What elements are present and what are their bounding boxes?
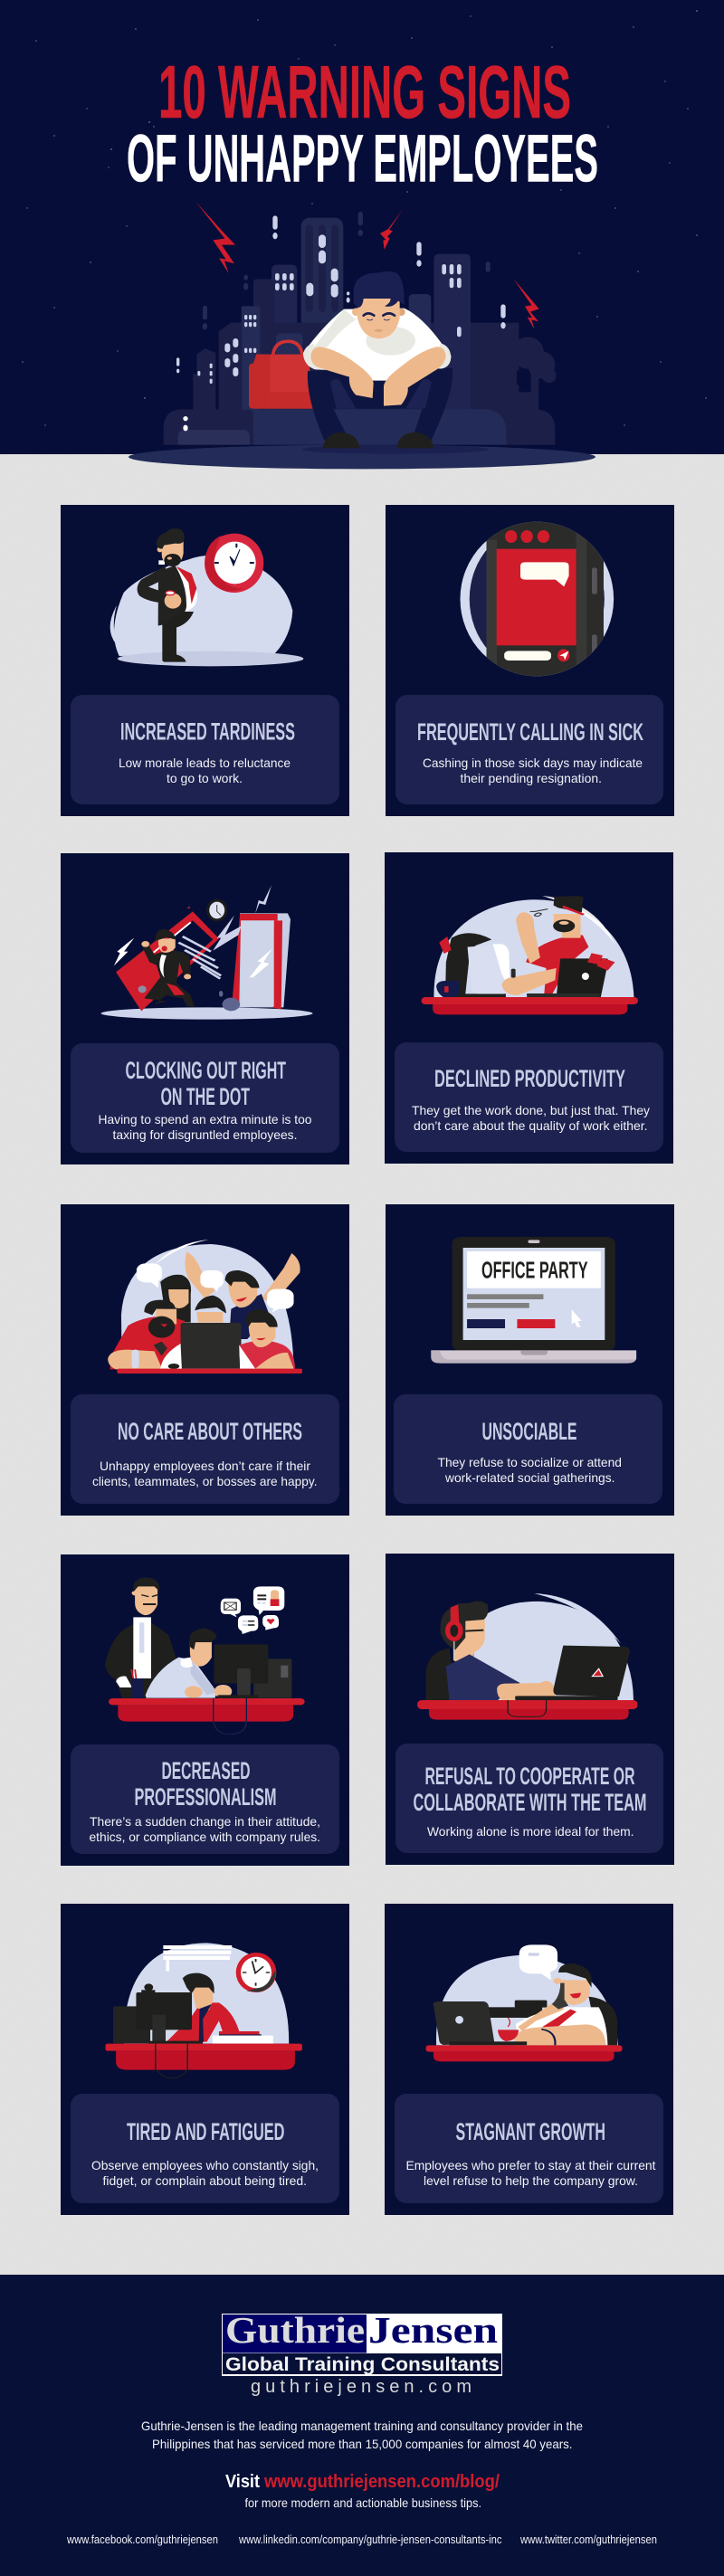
info box [395, 695, 663, 804]
description: to go to work. [167, 771, 243, 785]
illustration: man on the phone at desk [426, 1944, 623, 2061]
call to action: Visit [225, 2472, 260, 2492]
illustration: man checking watch beside clock [110, 528, 303, 666]
heading [125, 1057, 286, 1110]
social links: www.twitter.com/guthriejensen [519, 2533, 657, 2546]
description: work-related social gatherings. [444, 1470, 615, 1485]
panel: decreased professionalism [61, 1554, 349, 1866]
description: Employees who prefer to stay at their current [405, 2158, 656, 2172]
footer [0, 2275, 724, 2576]
illustration: laptop showing office party invitation [431, 1237, 636, 1364]
description: don’t care about the quality of work either. [414, 1118, 648, 1133]
description [412, 1103, 650, 1133]
heading: UNSOCIABLE [481, 1418, 577, 1445]
panel: frequently calling in sick [386, 505, 674, 816]
illustration: laptop showing office party invitation: OFFICE PARTY [481, 1256, 588, 1283]
hero illustration: sad employee in the city [129, 202, 595, 469]
about text [141, 2419, 583, 2451]
description: their pending resignation. [460, 771, 602, 785]
illustration: employee running out the door [101, 885, 313, 1020]
description: They get the work done, but just that. They [412, 1103, 650, 1117]
illustration: frustrated man at laptop [422, 896, 638, 1014]
panel: stagnant growth [385, 1904, 673, 2215]
description: fidget, or complain about being tired. [103, 2173, 307, 2188]
info box [71, 1043, 339, 1153]
description [89, 1814, 320, 1844]
about text: Philippines that has serviced more than 15,000 companies for almost 40 years. [152, 2437, 572, 2451]
description: ethics, or compliance with company rules. [89, 1830, 320, 1844]
red bag [249, 341, 315, 409]
info box [395, 2094, 663, 2203]
social links: www.linkedin.com/company/guthrie-jensen-consultants-inc [238, 2533, 501, 2546]
description: Working alone is more ideal for them. [427, 1824, 634, 1839]
panel: clocking out right on the dot [61, 853, 349, 1164]
info box [71, 695, 339, 804]
description: level refuse to help the company grow. [424, 2173, 638, 2188]
description [438, 1455, 622, 1485]
city skyline [193, 218, 557, 413]
description [91, 2158, 319, 2188]
sad employee [303, 271, 452, 448]
website: guthriejensen.com [251, 2377, 472, 2397]
info box [395, 1744, 663, 1853]
heading: DECREASED [161, 1757, 250, 1784]
social links [66, 2533, 657, 2546]
heading: ON THE DOT [161, 1083, 250, 1110]
description: Unhappy employees don’t care if their [100, 1459, 310, 1473]
call to action [225, 2472, 500, 2510]
heading [413, 1763, 646, 1816]
description: clients, teammates, or bosses are happy. [92, 1474, 317, 1488]
header band [0, 0, 724, 454]
lightning bolts [195, 202, 539, 329]
heading: INCREASED TARDINESS [120, 718, 295, 746]
panel: tired and fatigued [61, 1904, 349, 2215]
heading: STAGNANT GROWTH [456, 2118, 605, 2145]
panel: declined productivity [385, 852, 673, 1164]
description [423, 756, 643, 785]
ground ellipse [129, 445, 595, 469]
panel: no care about others [61, 1204, 349, 1516]
description [98, 1112, 312, 1142]
panel: refusal to cooperate [386, 1554, 674, 1865]
description: Observe employees who constantly sigh, [91, 2158, 319, 2172]
call to action: for more modern and actionable business tips. [244, 2495, 481, 2510]
illustration: tired woman at computer [106, 1943, 302, 2078]
heading: TIRED AND FATIGUED [127, 2118, 284, 2145]
heading: PROFESSIONALISM [134, 1783, 277, 1811]
logo: Guthrie Jensen [222, 2309, 502, 2376]
logo: Guthrie Jensen: Jensen [368, 2309, 498, 2351]
call to action: www.guthriejensen.com/blog/ [263, 2472, 500, 2492]
description: Having to spend an extra minute is too [98, 1112, 312, 1126]
info box [394, 1394, 662, 1504]
illustration: boss watching employee at computer [105, 1577, 305, 1735]
description [119, 756, 291, 785]
description: Cashing in those sick days may indicate [423, 756, 643, 770]
info box [71, 2094, 339, 2203]
description: They refuse to socialize or attend [438, 1455, 622, 1469]
heading: NO CARE ABOUT OTHERS [118, 1418, 302, 1445]
info box [71, 1394, 339, 1504]
title [127, 50, 598, 195]
illustration: employee with headphones at laptop [417, 1593, 637, 1720]
info box [71, 1744, 339, 1854]
heading [134, 1757, 277, 1811]
panel: increased tardiness [61, 505, 349, 816]
social links: www.facebook.com/guthriejensen [66, 2533, 218, 2546]
description: taxing for disgruntled employees. [112, 1127, 297, 1142]
exclamation marks [176, 215, 506, 373]
panel: unsociable [386, 1204, 674, 1516]
illustration: group around laptop [108, 1240, 302, 1374]
heading: CLOCKING OUT RIGHT [125, 1057, 286, 1084]
info box [395, 1042, 663, 1152]
illustration: phone [460, 518, 614, 679]
description [92, 1459, 317, 1488]
logo: Guthrie Jensen: Guthrie [225, 2309, 365, 2351]
description: There’s a sudden change in their attitude, [90, 1814, 320, 1829]
logo: Guthrie Jensen: Global Training Consultants [225, 2354, 500, 2375]
base hills [164, 409, 555, 445]
description: Low morale leads to reluctance [119, 756, 291, 770]
about text: Guthrie-Jensen is the leading management training and consultancy provider in the [141, 2419, 583, 2433]
description [405, 2158, 656, 2188]
lit windows [197, 234, 462, 384]
